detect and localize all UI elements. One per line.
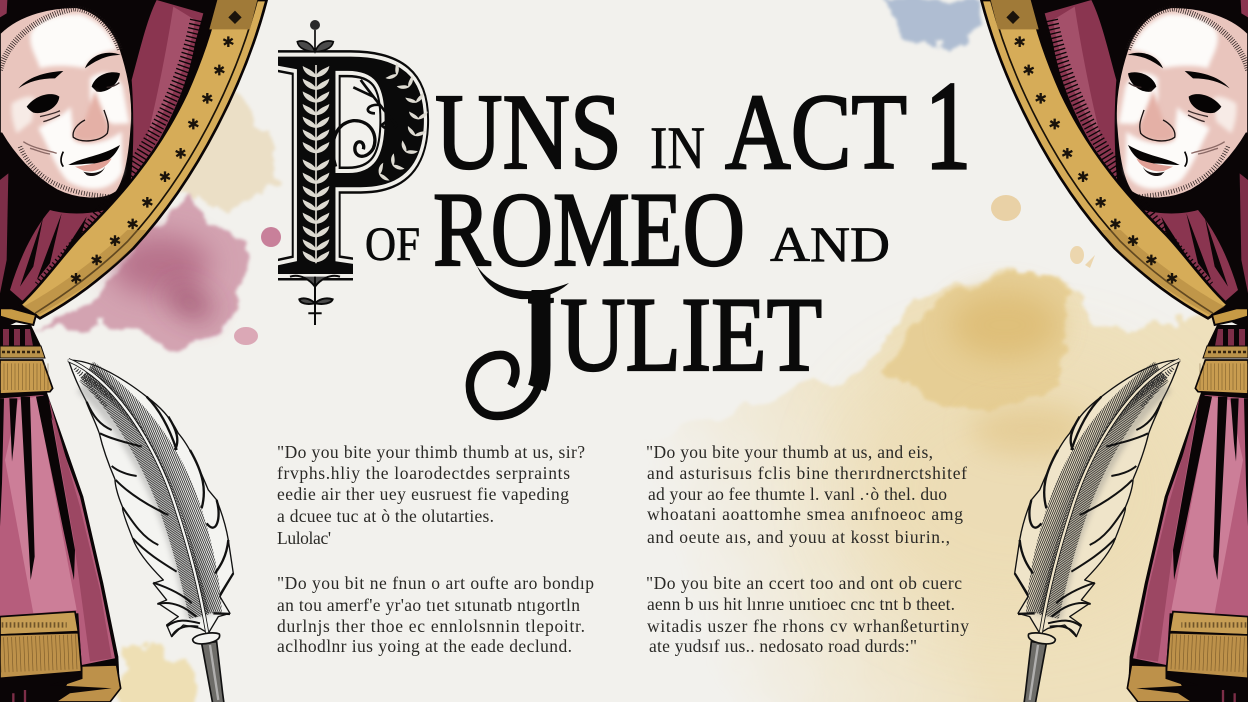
left curtain with mask <box>0 0 267 702</box>
paragraph 1: eedie air ther uey eusruest fie vapeding <box>277 484 569 504</box>
stain: tan left <box>160 90 277 212</box>
title line 1: ACT <box>725 73 907 192</box>
title <box>365 57 971 416</box>
stain: ochre lower patch <box>970 404 1090 456</box>
title line 3: ULIET <box>560 276 822 393</box>
paragraph 2: durlnjs ther thoe ec ennlolsnnin tlepoitr. <box>277 616 585 636</box>
paragraph 1: frvphs.hliy the loarodectdes serpraints <box>277 463 570 483</box>
title line 3 <box>470 266 822 416</box>
paragraph 3: and oeute aıs, and youu at kosst biurin., <box>647 527 950 547</box>
paragraph 1: Lulolac' <box>277 528 331 548</box>
title line 1: IN <box>650 115 705 181</box>
paragraph 4 <box>646 573 969 656</box>
letter P <box>278 50 430 280</box>
spots <box>261 227 281 247</box>
title line 1 <box>435 57 971 196</box>
title line 2: ROMEO <box>433 171 745 288</box>
paragraph 4: witadis uszer fhe rhons cv wrhanßeturtiny <box>647 616 969 636</box>
stain: ochre core <box>950 291 1060 359</box>
stain: wine dark <box>164 283 216 323</box>
stain: warm glow behind right text <box>850 360 1190 620</box>
title line 2: OF <box>365 218 420 271</box>
left quill feather <box>68 360 233 702</box>
stain: blue <box>880 0 985 46</box>
stain: bottom ochre <box>118 640 205 702</box>
right curtain with mask <box>981 0 1248 702</box>
title line 1: UNS <box>435 73 622 192</box>
title line 3: J <box>513 275 555 394</box>
right column text <box>646 442 969 656</box>
illuminated initial P <box>278 20 430 325</box>
paragraph 4: "Do you bite an ccert too and ont ob cuerc <box>646 573 962 593</box>
paragraph 3: ad your ao fee thumte l. vanl .·ò thel. duo <box>648 484 947 504</box>
paragraph 4: ate yudsıf ıus.. nedosato road durds:" <box>649 636 917 656</box>
paragraph 4: aenn b uıs hit lınrıe unıtioec cnc tnt b theet. <box>647 594 955 614</box>
stain: right gold wash <box>640 268 1248 702</box>
paragraph 1 <box>277 442 585 548</box>
title line 2: AND <box>770 216 890 272</box>
title line 1: 1 <box>925 57 971 196</box>
paragraph 1: a dcuee tuc at ò the olutarties. <box>277 506 494 526</box>
paragraph 2: an tou amerf'e yr'ao tıet sıtunatb ntıgortln <box>277 595 580 615</box>
paragraph 2 <box>277 573 594 656</box>
left column text <box>277 442 594 656</box>
paragraph 2: aclhodlnr ius yoing at the eade declund. <box>277 636 572 656</box>
stain: wine core <box>110 235 210 295</box>
stain: wine <box>35 202 245 352</box>
paragraph 3 <box>646 442 967 547</box>
paragraph 3: and asturisuıs fclis bine therırdnerctshitef <box>647 463 967 483</box>
right quill feather <box>1015 360 1180 702</box>
stain: strong ochre wash <box>885 270 1078 410</box>
paragraph 1: "Do you bite your thimb thumb at us, sir? <box>277 442 585 462</box>
paragraph 3: whoatani aoattomhe smea anıfnoeoc amg <box>647 504 963 524</box>
paragraph 2: "Do you bit ne fnun o art oufte aro bondıp <box>277 573 594 593</box>
paragraph 3: "Do you bite your thumb at us, and eis, <box>646 442 933 462</box>
